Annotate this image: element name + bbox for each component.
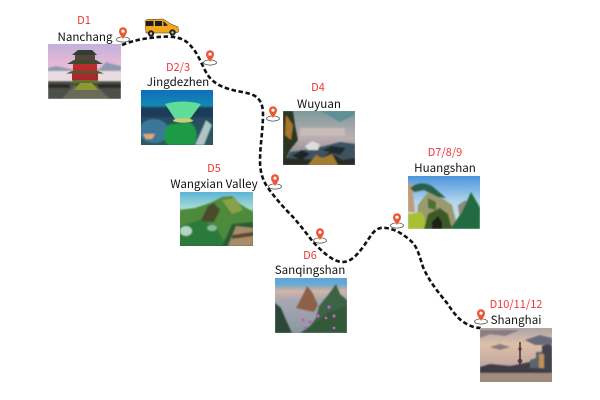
label: D5 Wangxian Valley: D5 [207,160,221,176]
label: D4 Wuyuan: D4 [311,79,325,95]
photo: Wangxian Valley [180,192,253,246]
dashed route [122,37,481,328]
label: D1 Nanchang: D1 [77,12,91,28]
photo: Sanqingshan [275,278,347,333]
location pins [116,27,488,324]
label: D5 Wangxian Valley: Wangxian Valley [170,176,258,192]
label: D6 Sanqingshan: Sanqingshan [275,262,345,278]
label: D10/11/12 Shanghai: D10/11/12 [490,296,542,312]
label: D10/11/12 Shanghai [490,296,542,328]
label: D7/8/9 Huangshan: Huangshan [414,160,476,176]
photo: Nanchang pavilion [48,44,121,99]
label: D10/11/12 Shanghai: Shanghai [491,312,541,328]
label: D5 Wangxian Valley [170,160,258,192]
label: D7/8/9 Huangshan [414,144,476,176]
icon: van [145,19,178,37]
label: D6 Sanqingshan: D6 [303,247,317,263]
label: D1 Nanchang [57,12,113,45]
label: D2/3 Jingdezhen: Jingdezhen [147,74,209,90]
label: D7/8/9 Huangshan: D7/8/9 [428,144,462,160]
label: D1 Nanchang: Nanchang [57,29,113,45]
label: D4 Wuyuan [297,79,341,112]
photo: Huangshan [408,176,480,229]
photo: Wuyuan [283,111,355,165]
photo: Shanghai [480,328,552,382]
photo: Jingdezhen [139,90,213,145]
label: D2/3 Jingdezhen [147,59,209,90]
label: D4 Wuyuan: Wuyuan [297,96,341,112]
label: D2/3 Jingdezhen: D2/3 [166,59,190,75]
label: D6 Sanqingshan [275,247,345,278]
